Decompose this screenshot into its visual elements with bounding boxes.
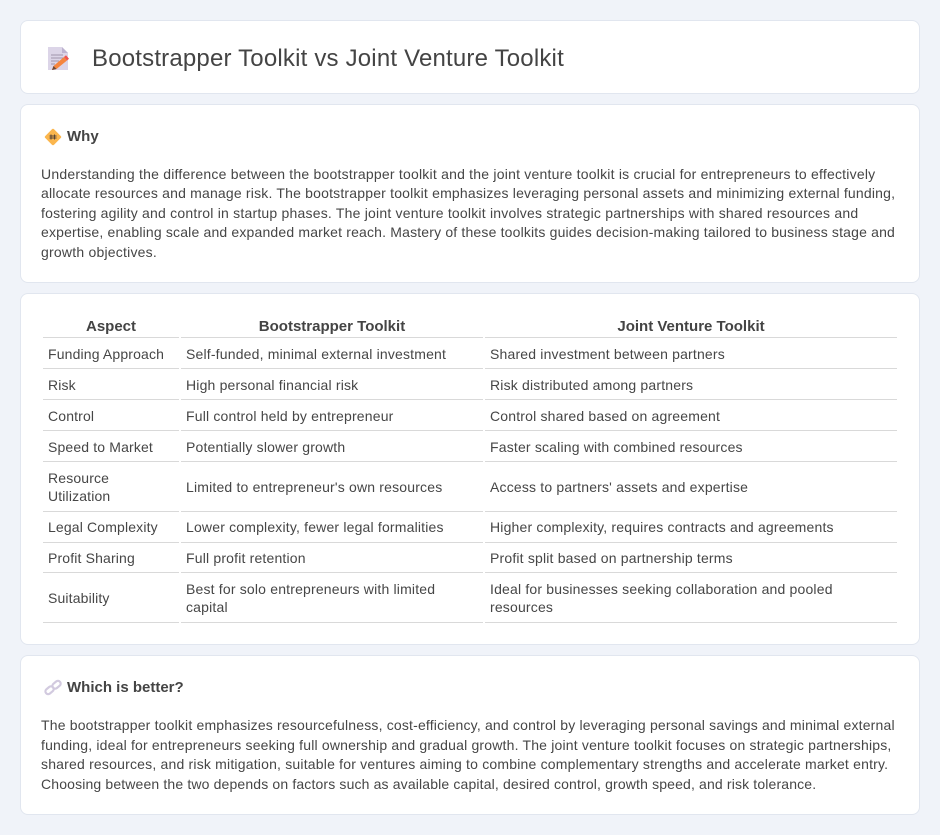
row: risk: Risk distributed among partners xyxy=(490,377,693,393)
row: legal complexity: Legal Complexity xyxy=(48,519,158,535)
text block: which is better paragraph xyxy=(41,717,895,792)
row: profit sharing xyxy=(48,550,733,566)
text block: why paragraph: growth objectives. xyxy=(41,244,157,260)
row: legal complexity: Lower complexity, fewer legal formalities xyxy=(186,519,444,535)
icon: memo with pencil xyxy=(48,47,69,70)
row: resource utilization: Resource xyxy=(48,470,109,486)
row: funding approach: Self-funded, minimal external investment xyxy=(186,346,446,362)
text block: which is better paragraph: funding, ideal for entrepreneurs seeking full ownership and gradual growth. The joint venture toolkit focuses on strategic partnerships, xyxy=(41,737,891,753)
panel: why xyxy=(20,104,920,283)
icon: diamond sign xyxy=(44,128,62,146)
panel: which is better xyxy=(20,655,920,815)
row: speed to market: Potentially slower growth xyxy=(186,439,345,455)
table header: Joint Venture Toolkit xyxy=(617,318,765,335)
row: resource utilization: Utilization xyxy=(48,488,110,504)
row: speed to market xyxy=(48,439,743,455)
table header xyxy=(86,318,765,335)
row: risk xyxy=(48,377,693,393)
text block: why paragraph: expertise, enabling scale and expanded market reach. Mastery of these toolkits guides decision-making tailored to business stage and xyxy=(41,224,895,240)
table header: Aspect xyxy=(86,318,136,335)
title: Bootstrapper Toolkit vs Joint Venture Toolkit xyxy=(92,45,564,72)
row: risk: Risk xyxy=(48,377,76,393)
text block: which is better paragraph: Choosing between the two depends on factors such as available capital, desired control, growth speed, and risk tolerance. xyxy=(41,776,816,792)
row: risk: High personal financial risk xyxy=(186,377,358,393)
text block: why paragraph xyxy=(41,166,895,260)
row: funding approach xyxy=(48,346,725,362)
row: funding approach: Shared investment between partners xyxy=(490,346,725,362)
text block: why paragraph: Understanding the difference between the bootstrapper toolkit and the joint venture toolkit is crucial for entrepreneurs to effectively xyxy=(41,166,875,182)
icon: link xyxy=(44,680,62,696)
row: profit sharing: Full profit retention xyxy=(186,550,306,566)
heading: which is better: Which is better? xyxy=(67,679,184,696)
row: suitability xyxy=(48,581,833,615)
row: suitability: Best for solo entrepreneurs with limited xyxy=(186,581,435,597)
row: funding approach: Funding Approach xyxy=(48,346,164,362)
row: control: Full control held by entrepreneur xyxy=(186,408,394,424)
heading: why: Why xyxy=(67,128,99,145)
panel: comparison table xyxy=(20,293,920,645)
row: suitability: Suitability xyxy=(48,590,110,606)
text block: which is better paragraph: The bootstrapper toolkit emphasizes resourcefulness, cost-efficiency, and control by leveraging personal savings and minimal external xyxy=(41,717,895,733)
row: resource utilization: Limited to entrepreneur's own resources xyxy=(186,479,442,495)
text block: why paragraph: fostering agility and control in startup phases. The joint venture toolkit involves strategic partnerships with shared resources and xyxy=(41,205,858,221)
table header: Bootstrapper Toolkit xyxy=(259,318,405,335)
text block: which is better paragraph: shared resources, and risk mitigation, suitable for ventures aiming to combine complementary strengths and accelerate market entry. xyxy=(41,756,888,772)
row: control xyxy=(48,408,720,424)
row: profit sharing: Profit split based on partnership terms xyxy=(490,550,733,566)
row: suitability: capital xyxy=(186,599,228,615)
panel: header xyxy=(20,20,920,94)
row: resource utilization: Access to partners' assets and expertise xyxy=(490,479,748,495)
row: resource utilization xyxy=(48,470,748,504)
row: suitability: resources xyxy=(490,599,553,615)
row: legal complexity xyxy=(48,519,834,535)
row: legal complexity: Higher complexity, requires contracts and agreements xyxy=(490,519,834,535)
row: speed to market: Faster scaling with combined resources xyxy=(490,439,743,455)
row: profit sharing: Profit Sharing xyxy=(48,550,135,566)
text block: why paragraph: allocate resources and manage risk. The bootstrapper toolkit emphasizes leveraging personal assets and minimizing external funding, xyxy=(41,185,895,201)
row: suitability: Ideal for businesses seeking collaboration and pooled xyxy=(490,581,833,597)
row: control: Control shared based on agreement xyxy=(490,408,720,424)
row: control: Control xyxy=(48,408,94,424)
row: speed to market: Speed to Market xyxy=(48,439,153,455)
